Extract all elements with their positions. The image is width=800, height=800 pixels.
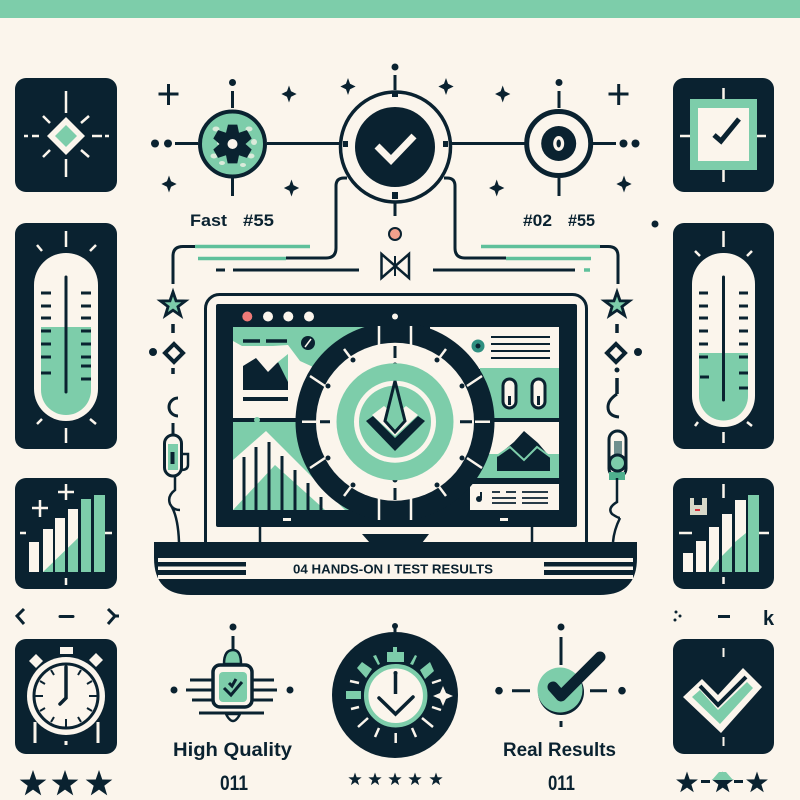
icon: real results check <box>495 624 626 727</box>
right ornament column <box>605 292 642 542</box>
top marks: bottom right: k <box>763 608 775 630</box>
right tile: text card <box>430 327 559 369</box>
panel: clock <box>15 639 117 754</box>
panel: right thermometer <box>673 223 774 449</box>
stars: check rating <box>676 772 768 792</box>
laptop <box>154 294 637 595</box>
label: fast <box>190 211 274 230</box>
right tile: notes <box>470 484 559 510</box>
icon: central check badge <box>340 92 450 202</box>
top marks: bottom right <box>674 608 775 630</box>
connector lines <box>173 75 618 284</box>
top marks: bottom left <box>17 609 119 624</box>
icon: pink node and bow tie <box>382 228 409 278</box>
panel: left thermometer <box>15 223 117 449</box>
gauge dial <box>296 322 494 521</box>
right tile: mountains <box>470 422 559 478</box>
label: high quality number: 011 <box>220 772 248 795</box>
panel: big check badge <box>673 639 774 754</box>
left ornament column <box>149 292 188 542</box>
panel: diamond icon <box>15 78 117 192</box>
laptop frame <box>206 294 586 556</box>
gauge arrow icon <box>366 381 425 451</box>
icon: target circle <box>527 112 591 176</box>
panel: right bar chart <box>673 478 774 589</box>
stars: clock rating <box>20 770 112 795</box>
label: real results: Real Results <box>503 740 616 761</box>
icon: high quality chip <box>170 624 294 721</box>
laptop notch and feet <box>260 514 532 543</box>
laptop screen <box>216 304 577 527</box>
label: numbers: #55 <box>568 211 595 230</box>
icon: speed dial <box>332 623 458 758</box>
right tile: toggles <box>480 368 559 418</box>
icon: gear circle <box>200 112 265 176</box>
base label band <box>158 558 633 579</box>
label: fast: #55 <box>243 211 274 230</box>
label: high quality: High Quality <box>173 740 292 761</box>
laptop base <box>154 542 637 595</box>
base label band: 04 HANDS-ON I TEST RESULTS <box>293 562 493 576</box>
label: numbers <box>523 211 595 230</box>
label: numbers: #02 <box>523 211 552 230</box>
stars: dial rating <box>348 772 443 785</box>
top accent bar <box>0 0 800 18</box>
panel: left bar chart <box>15 478 117 589</box>
label: fast: Fast <box>190 211 227 230</box>
left tile: bar mountain <box>233 417 368 510</box>
panel: checkbox <box>673 78 774 192</box>
dots and sparkles <box>151 64 658 228</box>
window dots <box>242 312 398 322</box>
label: real results number: 011 <box>548 772 575 795</box>
left tile: image card <box>233 327 368 418</box>
